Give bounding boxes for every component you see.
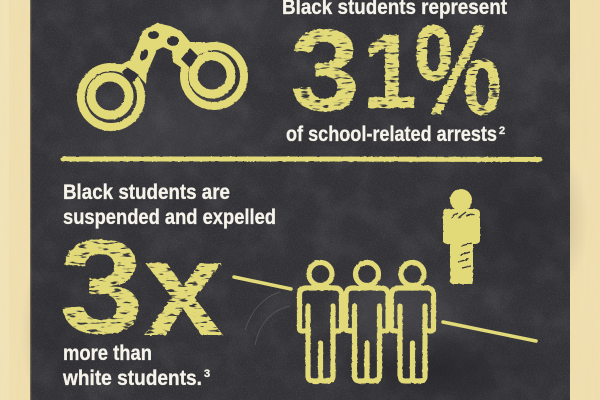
statistic: 31%: 1 [362,11,417,131]
icon: single solid student [443,189,480,284]
icon: handcuffs [81,23,244,127]
caption: more than white students: white students. [62,367,202,390]
caption: more than white students: 3 [204,368,210,380]
caption: more than white students [62,342,210,390]
statistic: 3x: x [143,212,224,364]
caption: of school-related arrests: 2 [499,125,505,137]
text: Black students are suspended and expelled: suspended and expelled [63,206,276,229]
seesaw line: right [443,322,536,341]
statistic: 31%: % [414,0,502,142]
text: Black students are suspended and expelled: Black students are [63,181,230,204]
statistic: 3x: 3 [59,213,144,362]
statistic: 31%: 3 [290,5,360,135]
student 2 [346,262,388,381]
seesaw line: left [234,277,291,289]
caption: of school-related arrests: of school-related arrests [286,123,497,146]
statistic: 3x [59,212,224,364]
student 1 [300,262,342,381]
caption: more than white students: more than [63,342,152,365]
divider line [63,156,540,162]
text: Black students are suspended and expelled [63,181,276,229]
icon: three outlined students [300,262,434,381]
student 3 [392,262,434,381]
statistic: 31% [290,0,502,142]
